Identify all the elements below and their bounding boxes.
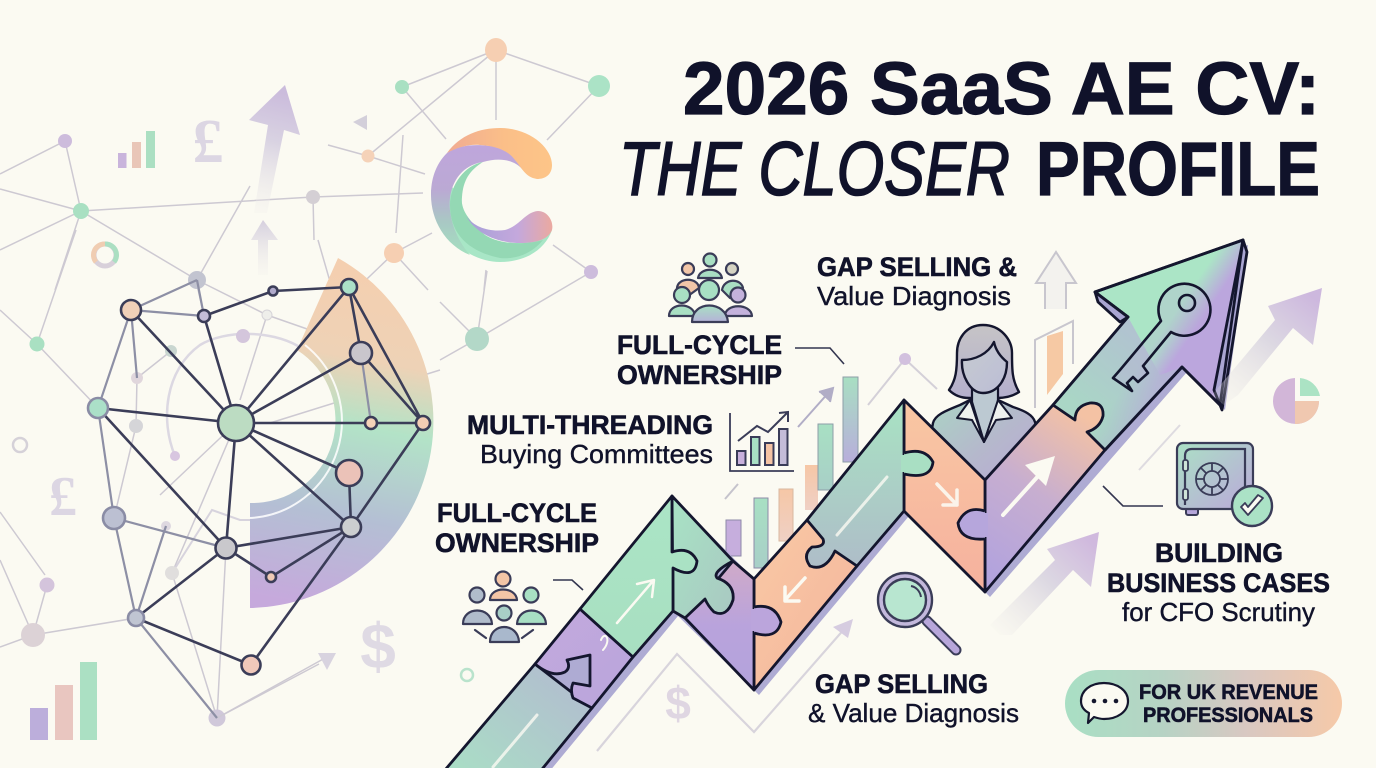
label: gap selling lower: & Value Diagnosis <box>808 698 1019 728</box>
title: PROFILE <box>1036 127 1320 212</box>
label: building business cases: for CFO Scrutiny <box>1122 597 1315 627</box>
puzzle piece: green rising <box>580 496 697 657</box>
icon: magnifying glass <box>878 573 956 650</box>
main arrow: zigzag puzzle <box>428 240 1247 768</box>
faint arrow: small up arrow <box>251 220 278 275</box>
network diagram foreground <box>88 279 430 718</box>
dollar symbol lower: $ <box>665 677 691 729</box>
faint arrow: large up arrow <box>249 85 300 213</box>
faint line right <box>1139 425 1180 470</box>
icon: growth chart <box>730 412 794 471</box>
pound symbol top: £ <box>192 108 224 176</box>
callout: for UK revenue professionals: PROFESSIONALS <box>1143 704 1313 727</box>
faint arrow: right lower <box>990 532 1099 635</box>
callout: for UK revenue professionals: FOR UK REVENUE <box>1139 681 1318 704</box>
puzzle piece: head <box>1053 240 1243 450</box>
title: 2026 SaaS AE CV: <box>683 47 1320 130</box>
mini bar chart top <box>118 131 155 168</box>
bottom-left bar chart <box>30 662 97 740</box>
faint up arrow outline <box>1036 252 1076 309</box>
pie icon <box>1273 378 1320 424</box>
white arrows on path <box>493 477 957 767</box>
small trend arrow <box>725 388 833 499</box>
faint arrow: network bottom <box>217 653 336 718</box>
icon: key <box>1113 284 1210 391</box>
nodes <box>13 38 610 726</box>
pound symbol left: £ <box>49 466 77 528</box>
label: full-cycle ownership top: OWNERSHIP <box>617 360 782 390</box>
label: full-cycle ownership lower: OWNERSHIP <box>435 528 599 558</box>
faint zigzag lower <box>597 619 853 751</box>
faint peak line <box>868 353 937 405</box>
orange bar outline <box>1035 321 1073 408</box>
label: full-cycle ownership top: FULL-CYCLE <box>617 330 782 360</box>
puzzle knob lavender <box>754 606 781 635</box>
main arrow: shadow <box>433 245 1248 768</box>
label: building business cases: BUILDING <box>1155 538 1283 568</box>
label: gap selling top: GAP SELLING & <box>817 252 1017 282</box>
label: full-cycle ownership top <box>617 330 782 390</box>
dollar symbol: $ <box>360 610 396 682</box>
puzzle piece: lavender valley <box>685 561 754 690</box>
puzzle piece: green right of peak <box>672 496 733 618</box>
icon: safe with check <box>1177 443 1272 526</box>
background bar chart behind arrow <box>726 377 858 568</box>
faint arrow: right upper <box>1212 288 1322 405</box>
triangle mark <box>353 115 367 130</box>
puzzle piece: lavender to peach <box>985 403 1105 592</box>
puzzle knob into peach piece <box>958 510 985 539</box>
logo: C mark <box>431 128 552 262</box>
label: multi-threading <box>467 410 713 469</box>
label: multi-threading: Buying Committees <box>480 439 713 469</box>
label: gap selling top: Value Diagnosis <box>817 281 1011 311</box>
puzzle piece: peach lower <box>754 520 857 690</box>
label: building business cases: BUSINESS CASES <box>1107 568 1330 598</box>
large white arrow <box>1003 456 1055 515</box>
label: full-cycle ownership lower: FULL-CYCLE <box>437 498 597 528</box>
callout: for UK revenue professionals <box>1065 670 1342 737</box>
label: gap selling lower: GAP SELLING <box>815 669 988 699</box>
puzzle piece: lavender lower <box>535 609 633 708</box>
label: full-cycle ownership lower <box>435 498 599 558</box>
chart: quarter arc <box>250 258 433 608</box>
icon: team top <box>669 254 752 322</box>
label: building business cases <box>1107 538 1330 627</box>
faint background network <box>0 38 610 726</box>
puzzle piece: green grey <box>806 400 904 567</box>
key hole <box>1179 295 1195 311</box>
label: gap selling lower <box>808 669 1019 728</box>
donut icon <box>93 244 117 266</box>
network nodes <box>88 279 430 674</box>
title: THE CLOSER <box>619 127 1010 212</box>
icon: speech bubble <box>1081 683 1128 723</box>
icon: team lower <box>463 572 546 642</box>
figure: woman <box>930 325 1040 495</box>
title <box>619 47 1320 212</box>
label: gap selling top <box>817 252 1017 311</box>
puzzle piece: peach tall <box>904 400 985 592</box>
puzzle piece: bottom grey green <box>428 664 592 768</box>
label: multi-threading: MULTI-THREADING <box>467 410 713 440</box>
puzzle knob green <box>904 451 933 476</box>
connector lines <box>553 348 1163 590</box>
